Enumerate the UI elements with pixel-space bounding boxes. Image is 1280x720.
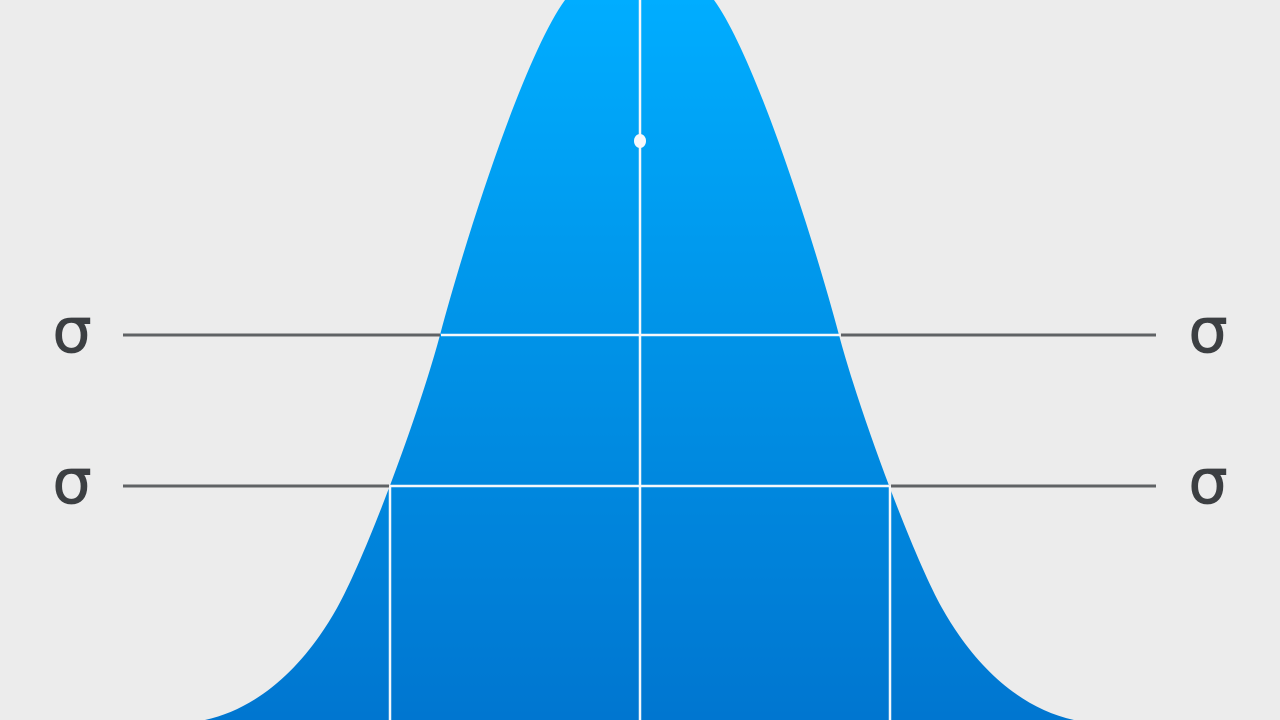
sigma label upper right: σ	[1188, 294, 1228, 367]
upper left leader line	[123, 334, 440, 336]
bell curve shape	[205, 0, 1074, 720]
lower left leader line	[123, 484, 389, 488]
lower horizontal line inside curve	[390, 485, 889, 487]
sigma label lower right: σ	[1188, 445, 1228, 518]
centre vertical line	[639, 0, 641, 720]
sigma label upper left: σ	[52, 294, 92, 367]
mean marker dot	[634, 134, 646, 148]
upper horizontal line inside curve	[441, 334, 840, 336]
left vertical line	[389, 486, 391, 720]
lower right leader line	[891, 484, 1156, 488]
upper right leader line	[841, 334, 1156, 336]
right vertical line	[889, 486, 891, 720]
sigma label lower left: σ	[52, 445, 92, 518]
